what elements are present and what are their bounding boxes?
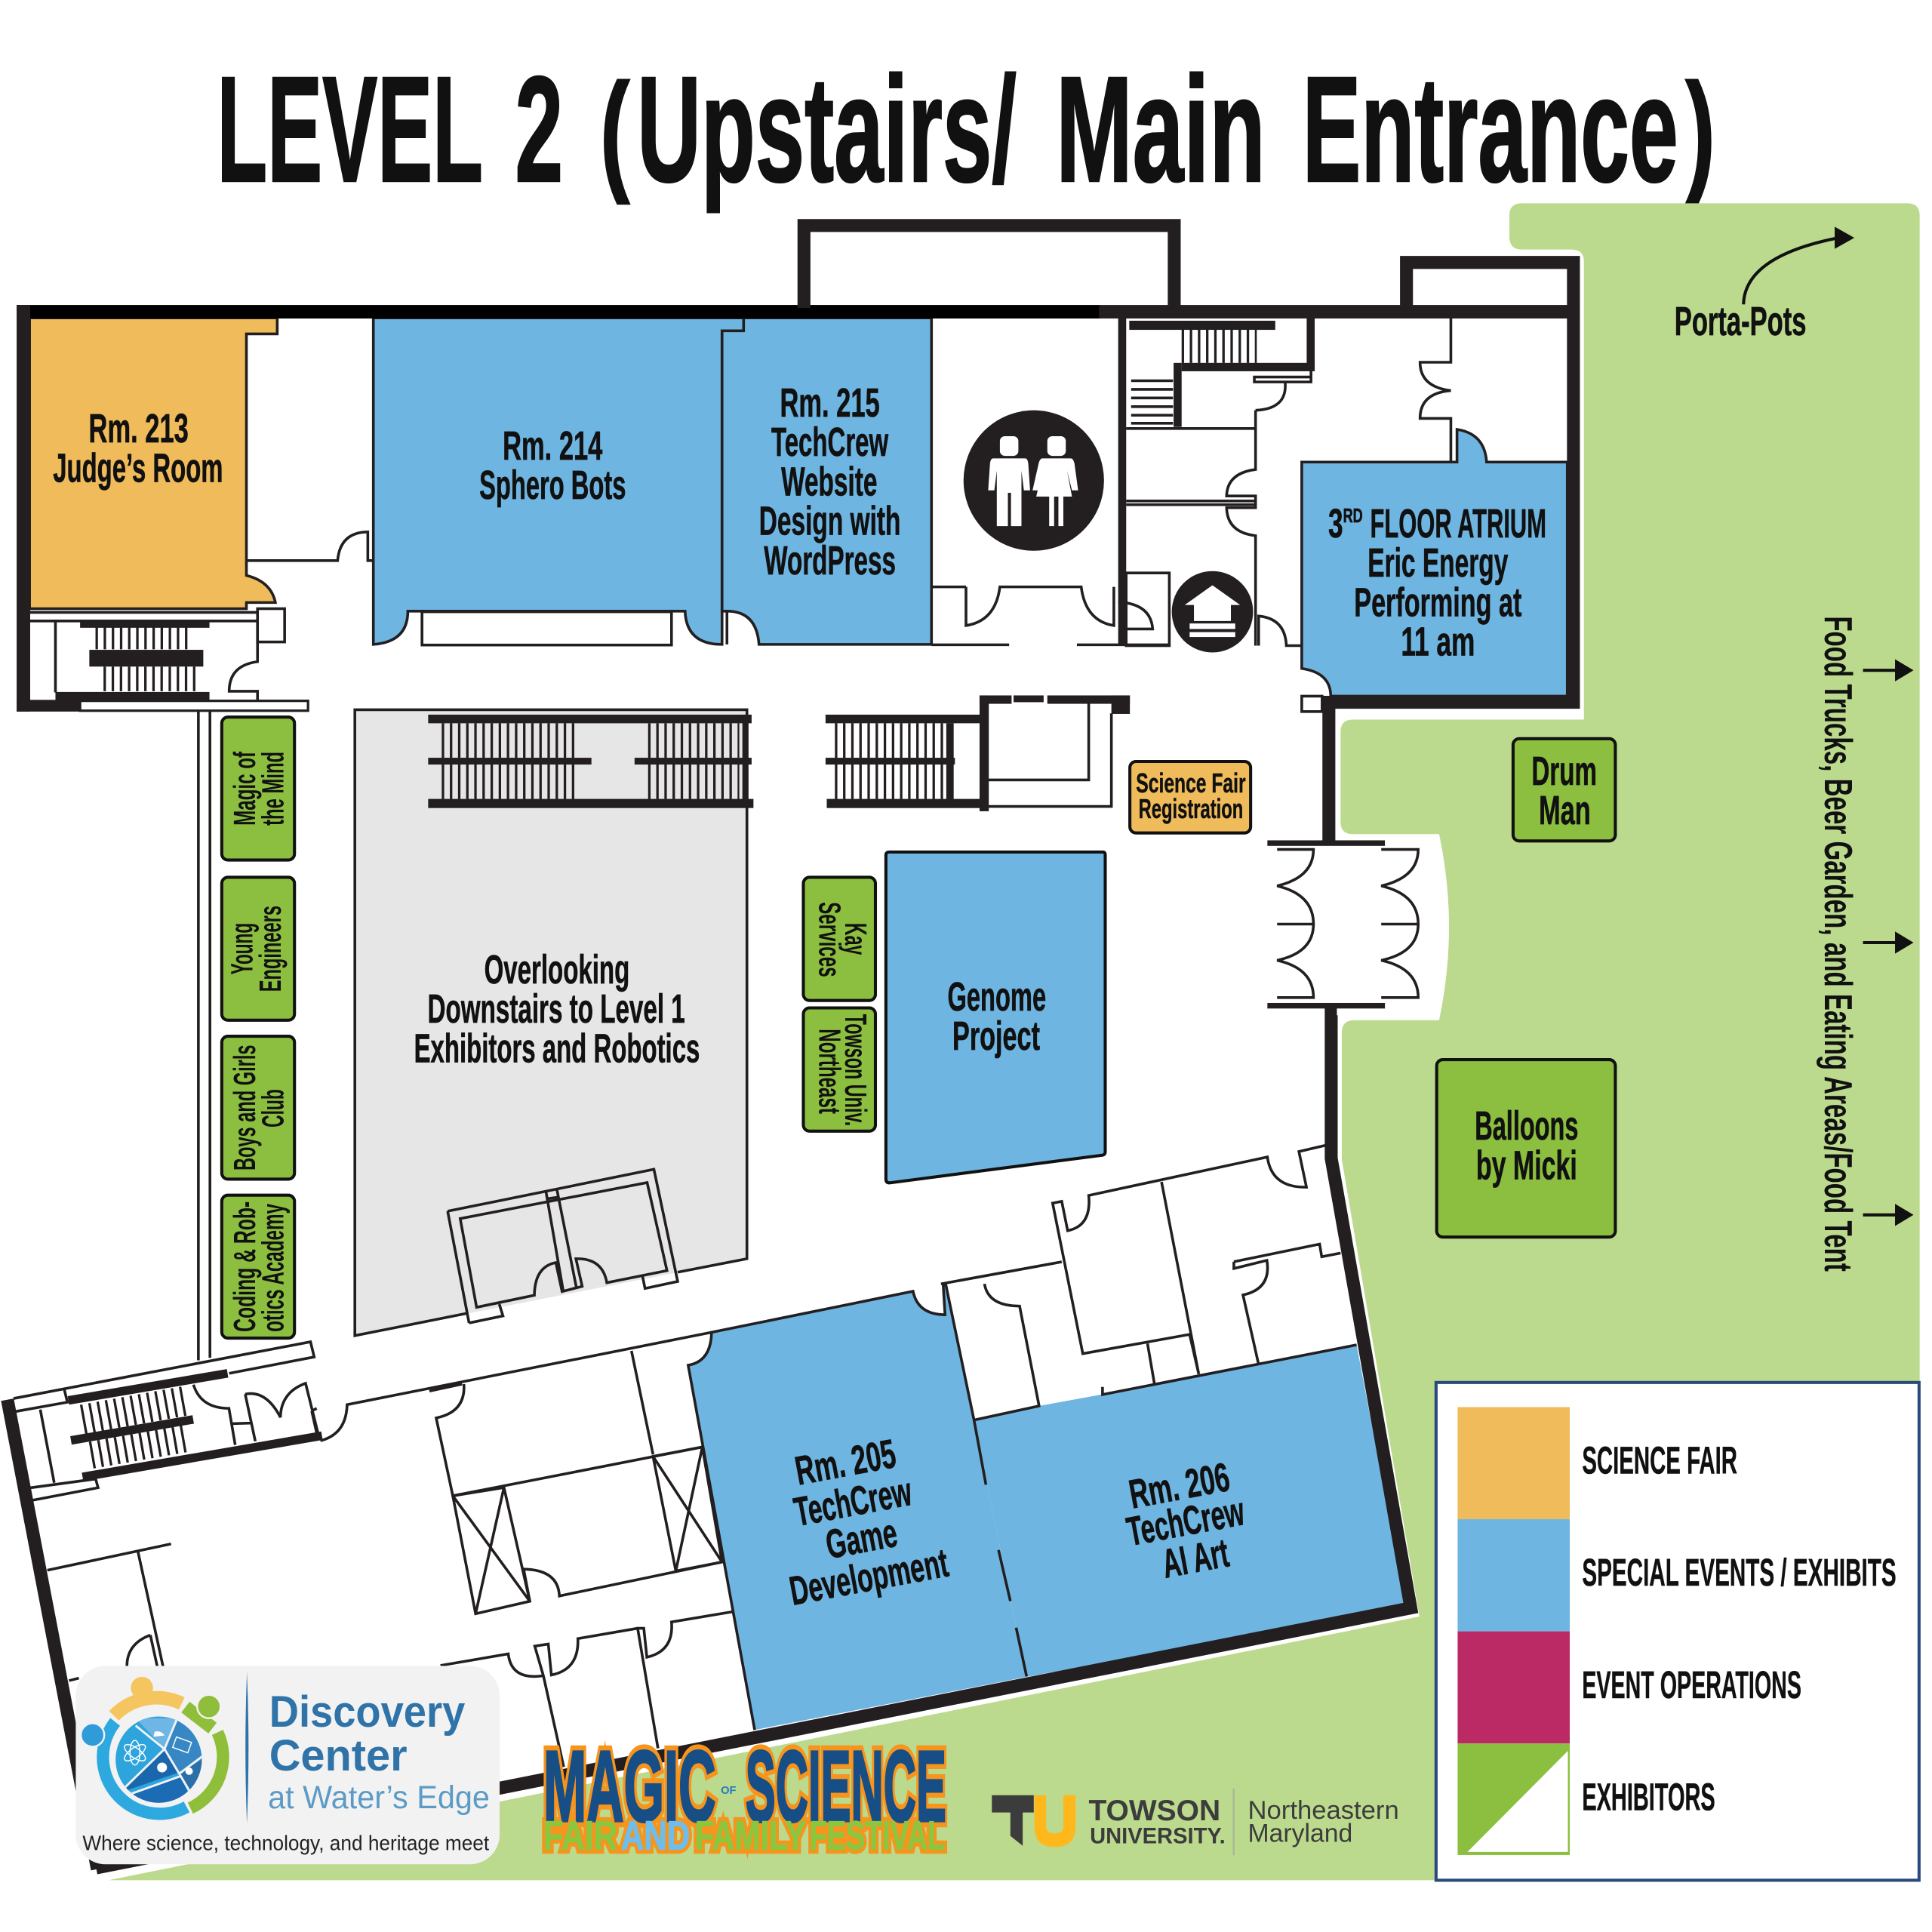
upper left stair room (30, 609, 308, 711)
overlook label (414, 947, 700, 1071)
discovery center logo: Center (269, 1731, 408, 1780)
magic of science logo: AND (621, 1814, 690, 1859)
room 205 fill (688, 1285, 1026, 1730)
overlook label: Downstairs to Level 1 (428, 986, 685, 1032)
magic of science logo: FESTIVAL (810, 1814, 945, 1859)
towson university logo: Maryland (1248, 1819, 1352, 1847)
exhibitor: towson univ northeast: Northeast (813, 1029, 848, 1114)
room 214 label: Rm. 214 (503, 423, 602, 469)
magic of science logo: FAMILY (695, 1814, 806, 1859)
restroom and service core walls (1118, 318, 1451, 712)
exhibitor: young engineers: Young (225, 923, 260, 974)
room 205 label: Rm. 205 (792, 1431, 900, 1494)
atrium label: RD (1343, 504, 1363, 527)
towson university logo: Northeastern (1248, 1796, 1399, 1825)
room 205 label (786, 1431, 952, 1614)
second stairs and lift (826, 695, 1130, 811)
porta-pots label and arrow: Porta-Pots (1675, 299, 1806, 344)
title: Upstairs/ (637, 46, 1017, 214)
lower centre interior walls (48, 1332, 733, 1767)
towson university logo: TOWSON (1088, 1795, 1220, 1827)
title: LEVEL (217, 46, 483, 214)
title: Entrance (1303, 46, 1678, 214)
genome project panel: Project (952, 1014, 1040, 1059)
science fair registration: Science Fair (1136, 768, 1246, 798)
white alcove and upper interior walls (198, 532, 1169, 1360)
exhibitor: kay services: Kay (838, 923, 873, 955)
room 206 label: AI Art (1158, 1531, 1232, 1587)
atrium fill (1302, 429, 1567, 696)
porta-pots label and arrow (1675, 226, 1854, 344)
magic of science logo: MAGIC (543, 1730, 716, 1843)
magic of science logo: OF (721, 1785, 737, 1797)
discovery center logo: Discovery (269, 1687, 466, 1737)
room 206 label: TechCrew (1123, 1488, 1248, 1555)
icon: discovery center emblem (81, 1677, 223, 1814)
magic of science logo: FESTIVAL (810, 1814, 945, 1859)
atrium label: Performing at (1354, 580, 1521, 625)
exhibitor: magic of the mind (222, 717, 294, 860)
exhibitor: towson univ northeast: Towson Univ. (838, 1014, 873, 1126)
exhibitor: magic of the mind: Magic of (227, 752, 262, 826)
title (217, 46, 1715, 214)
title: 2 (515, 46, 563, 214)
exhibitor: boys and girls club: Boys and Girls (227, 1044, 262, 1171)
icon: restrooms (964, 411, 1104, 551)
legend label: science fair: SCIENCE FAIR (1582, 1439, 1737, 1482)
drum man: Man (1539, 788, 1591, 833)
exhibitor: young engineers: Engineers (253, 906, 288, 992)
room divider between 205 and 206 (974, 1420, 1026, 1676)
atrium label: 3 (1328, 501, 1343, 546)
swatch: special events (1457, 1519, 1570, 1632)
room 205 label: Game (822, 1510, 901, 1567)
food area label: Food Trucks, Beer Garden, and Eating Areas/Food Tent (1816, 616, 1860, 1272)
room 214 fill (374, 318, 743, 645)
room 213 fill (29, 318, 277, 609)
room 215 label: Design with (759, 499, 900, 544)
towson university logo (992, 1789, 1399, 1855)
room 215 label: TechCrew (771, 420, 888, 465)
exhibitor: boys and girls club (222, 1036, 294, 1179)
lower right interior walls (941, 1146, 1357, 1420)
atrium label: FLOOR ATRIUM (1371, 501, 1546, 546)
overlook label: Exhibitors and Robotics (414, 1026, 700, 1071)
room 213 label: Rm. 213 (89, 406, 189, 451)
main entrance doors (1267, 839, 1449, 1015)
text: SCIENCE (746, 1730, 946, 1843)
room 206 label: Rm. 206 (1125, 1454, 1233, 1518)
arrows to food area (1863, 659, 1914, 1226)
magic of science logo: FAIR (543, 1814, 617, 1859)
title: Main (1056, 46, 1266, 214)
swatch: science fair (1457, 1407, 1570, 1519)
balloons by micki: by Micki (1476, 1143, 1577, 1188)
room 214 label (479, 423, 626, 508)
exhibitor: towson univ northeast (803, 1008, 875, 1131)
drum man: Drum (1531, 749, 1597, 794)
magic of science logo: FAIR (543, 1814, 617, 1859)
discovery center logo: Where science, technology, and heritage meet (82, 1831, 489, 1854)
exhibitor: coding and robotics academy: otics Academy (256, 1204, 291, 1332)
room 215 label (759, 380, 900, 583)
genome project panel (886, 852, 1105, 1183)
balloons by micki (1437, 1060, 1615, 1237)
magic of science logo: MAGIC (543, 1730, 716, 1843)
exhibitor: coding and robotics academy: Coding & Rob- (227, 1201, 262, 1332)
discovery center logo: at Water’s Edge (268, 1780, 490, 1815)
swatch: exhibitors (1457, 1743, 1570, 1855)
exterior walls (8, 226, 1580, 1869)
legend (1436, 1383, 1919, 1880)
room 215 label: Rm. 215 (780, 380, 880, 426)
room 215 label: WordPress (764, 538, 896, 583)
room 205 label: Development (786, 1540, 952, 1614)
genome project panel: Genome (948, 974, 1046, 1020)
science fair registration (1130, 761, 1251, 833)
text: SCIENCE (746, 1730, 946, 1843)
exhibitor: magic of the mind: the Mind (256, 752, 291, 826)
overlook label: Overlooking (485, 947, 629, 992)
legend label: exhibitors: EXHIBITORS (1582, 1775, 1715, 1818)
lower left stair core (14, 1342, 322, 1500)
room 213 label: Judge’s Room (53, 445, 223, 491)
balloons by micki: Balloons (1475, 1103, 1578, 1149)
exhibitor: kay services: Services (813, 902, 848, 977)
title: ( (600, 56, 629, 205)
atrium label: Eric Energy (1367, 540, 1508, 586)
room 205 label: TechCrew (791, 1469, 915, 1535)
room 205 outline (688, 1285, 974, 1730)
swatch: event operations (1457, 1632, 1570, 1743)
room 206 fill (974, 1345, 1406, 1677)
room 206 label (1123, 1454, 1248, 1587)
room 214 label: Sphero Bots (479, 463, 626, 508)
room 215 fill (722, 318, 931, 645)
room 213 label (53, 406, 223, 491)
science fair registration: Registration (1139, 793, 1243, 824)
atrium label: 11 am (1401, 620, 1475, 665)
exhibitor: kay services (803, 877, 875, 1001)
exhibitor: coding and robotics academy (222, 1195, 294, 1338)
overlook grey area (355, 709, 747, 1336)
room 215 label: Website (781, 459, 877, 504)
exhibitor: boys and girls club: Club (256, 1089, 291, 1128)
drum man (1513, 739, 1615, 841)
towson university logo: UNIVERSITY. (1090, 1823, 1226, 1848)
exhibitor: young engineers (222, 877, 294, 1020)
magic of science logo: FAMILY (695, 1814, 806, 1859)
atrium label (1328, 501, 1546, 665)
central stairs overlook (428, 715, 753, 808)
icon: stairs up (1172, 571, 1253, 652)
discovery center logo (75, 1666, 500, 1864)
title: ) (1685, 56, 1715, 205)
magic of science logo: AND (621, 1814, 690, 1859)
